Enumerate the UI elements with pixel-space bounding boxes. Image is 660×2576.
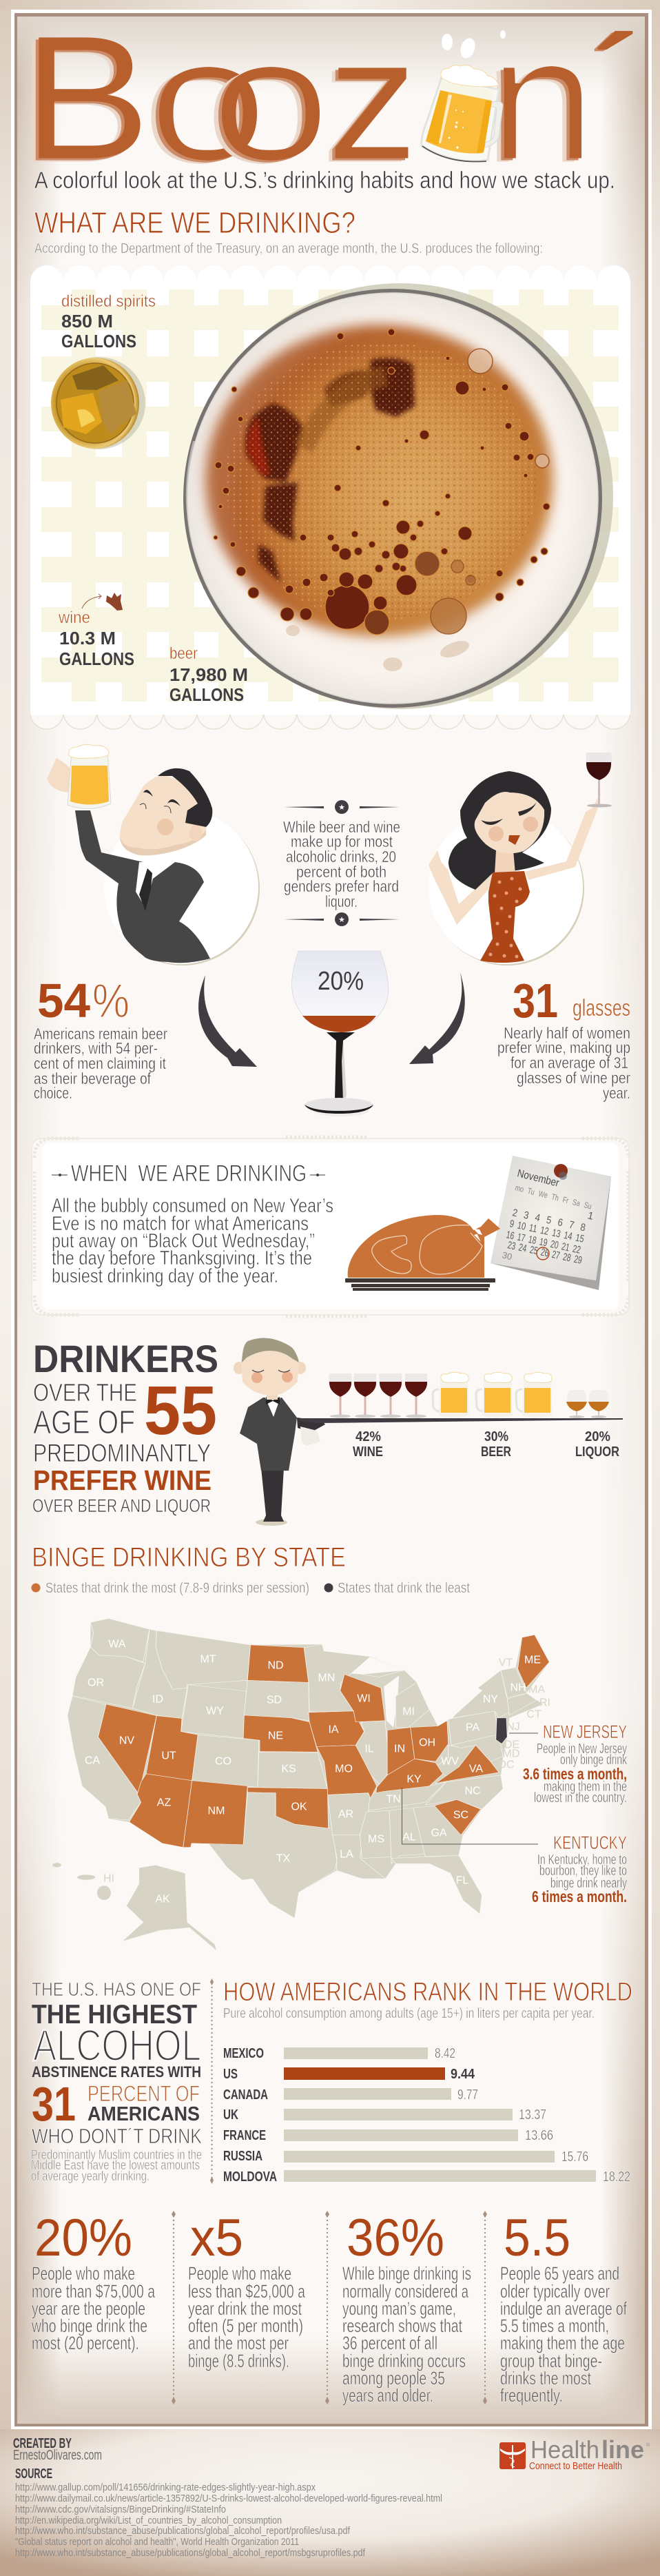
icon: wine stain and arrow [82, 593, 123, 611]
icon: calendar: 2 3 4 5 6 7 8 [511, 1207, 586, 1234]
source list [15, 2466, 442, 2559]
block: alcohol abstinence [31, 1979, 202, 2184]
map state labels: OH [419, 1737, 435, 1749]
stat column: 5.5: drinks the most [500, 2368, 591, 2389]
man shirt and tie [136, 862, 175, 911]
stat column: 36 percent [342, 2209, 471, 2406]
callout: Kentucky: KENTUCKY [553, 1832, 627, 1853]
map state labels: NE [268, 1730, 283, 1742]
label: wine: 10.3 M [59, 628, 116, 648]
title: Boozin': B [21, 0, 152, 196]
bubbles [214, 329, 550, 635]
bar: France: 13.66 [525, 2128, 553, 2143]
map state labels: DC [498, 1759, 515, 1771]
block: alcohol abstinence: PERCENT OF [87, 2081, 200, 2106]
source list: http://www.dailymail.co.uk/news/article-1357892/U-S-drinks-lowest-alcohol-developed-world-figures-reveal.html [15, 2493, 442, 2504]
credit: created by: ErnestoOlivares.com [13, 2448, 102, 2463]
label: wine [58, 609, 134, 669]
icon: roast turkey [345, 1215, 500, 1291]
stat: 31 glasses: prefer wine, making up [497, 1039, 630, 1056]
callout: beer and wine note: liquor. [325, 892, 358, 910]
man jacket [75, 810, 210, 963]
icon: calendar: 1 [586, 1209, 595, 1223]
dotted divider 3 [483, 2211, 487, 2404]
map state labels: SC [453, 1810, 468, 1821]
stat column: 20 percent: People who make [32, 2263, 135, 2284]
map state labels: ME [524, 1654, 541, 1666]
callout: beer and wine note: make up for most [291, 832, 393, 850]
map state labels: KS [281, 1763, 296, 1775]
map state labels: RI [539, 1697, 550, 1709]
stat column: x5: and the most per [188, 2333, 289, 2353]
map state labels: LA [340, 1848, 353, 1861]
label: 42 percent wine: 42% [355, 1429, 381, 1444]
logo: Healthline: Connect to Better Health [529, 2460, 622, 2472]
map state labels: HI [103, 1873, 114, 1884]
when paragraph: put away on “Black Out Wednesday,” [52, 1230, 315, 1252]
stat: 31 glasses: glasses [573, 995, 630, 1021]
when paragraph: All the bubbly consumed on New Year’s [52, 1195, 333, 1217]
source list: http://www.cdc.gov/vitalsigns/BingeDrinking/#StateInfo [15, 2504, 226, 2515]
callout: New Jersey: lowest in the country. [534, 1790, 627, 1806]
map state labels: NJ [506, 1721, 520, 1732]
stat column: x5: often (5 per month) [188, 2316, 303, 2336]
callout: Kentucky: binge drink nearly [550, 1876, 627, 1891]
map state labels: WI [357, 1693, 371, 1705]
woman wine glass [586, 753, 612, 808]
map state labels: SD [267, 1694, 282, 1706]
panel: production of alcohol [30, 265, 630, 729]
map state labels: AZ [157, 1797, 171, 1808]
label: distilled spirits: GALLONS [61, 331, 136, 351]
label: 30 percent beer: 30% [484, 1429, 508, 1444]
icon: calendar: November [516, 1167, 561, 1189]
waiter jacket [240, 1398, 297, 1471]
intro text: According to the Department of the Treasury, on an average month, the U.S. produces the following: [34, 241, 543, 256]
ornate border [32, 1137, 629, 1316]
source list: "Global status report on alcohol and health", World Health Organization 2011 [15, 2536, 299, 2548]
bar: Mexico: 8.42 [435, 2046, 455, 2061]
map state labels: TX [276, 1852, 291, 1865]
waiter shirt and bow tie [265, 1397, 280, 1417]
bar: Canada: CANADA [223, 2087, 268, 2103]
dotted divider [210, 1979, 214, 2184]
illustration: woman drinking wine [429, 753, 612, 965]
block: alcohol abstinence: THE U.S. HAS ONE OF [32, 1979, 201, 2000]
credit: created by [13, 2436, 102, 2463]
bar: Russia: RUSSIA [223, 2149, 262, 2164]
map state labels: ID [152, 1694, 163, 1705]
label: 20 percent liquor: 20% [585, 1429, 610, 1444]
waiter sleeve and towel [297, 1418, 325, 1446]
icon: calendar: 9 10 11 12 13 14 15 [508, 1218, 585, 1245]
bar: France [223, 2128, 553, 2143]
block: drinkers over age 55: AGE OF [33, 1404, 135, 1441]
woman dress [480, 871, 530, 963]
map state labels: MS [368, 1833, 384, 1846]
big wine glass with 20 percent [292, 951, 389, 1116]
block: alcohol abstinence: ABSTINENCE RATES WITH [32, 2063, 201, 2081]
callout: beer and wine note: genders prefer hard [284, 877, 399, 895]
stat: 31 glasses: 31 [513, 974, 558, 1028]
stat: 54 percent [34, 974, 167, 1102]
bar: France: FRANCE [223, 2128, 266, 2143]
stat: 54 percent: % [92, 974, 130, 1028]
stat column: x5: binge (8.5 drinks). [188, 2351, 289, 2371]
bar: US: 9.44 [451, 2067, 475, 2082]
heading: what are we drinking: WHAT ARE WE DRINKING? [34, 206, 355, 240]
man head [120, 768, 212, 855]
stat column: 36 percent: 36 percent of all [342, 2333, 437, 2353]
block: drinkers over age 55: 55 [144, 1372, 217, 1449]
bar: Canada [223, 2087, 478, 2103]
stat column: 5.5: older typically over [500, 2281, 610, 2302]
bar: UK [223, 2107, 546, 2123]
title: Boozin': o [209, 3, 332, 196]
block: alcohol abstinence: AMERICANS [87, 2103, 200, 2125]
label: wine: GALLONS [59, 648, 134, 669]
map state labels: MI [402, 1706, 415, 1717]
title: Boozin': z [327, 3, 419, 195]
stat column: 20 percent: who binge drink the [31, 2316, 147, 2336]
when heading: WHEN WE ARE DRINKING [71, 1161, 307, 1187]
bar: Moldova [223, 2169, 630, 2185]
bar: Russia [223, 2149, 588, 2165]
serving tray [300, 1418, 623, 1423]
bar: UK: 13.37 [519, 2107, 546, 2123]
block: alcohol abstinence: of average yearly drinking. [31, 2169, 149, 2184]
source list: http://www.gallup.com/poll/141656/drinking-rate-edges-slightly-year-high.aspx [15, 2482, 316, 2493]
stat: 54 percent: drinkers, with 54 per- [34, 1039, 158, 1057]
block: drinkers over age 55: PREFER WINE [33, 1464, 212, 1496]
stat: 54 percent: as their beverage of [34, 1070, 152, 1087]
map state labels [85, 1639, 550, 1905]
stat: 31 glasses: for an average of 31 [511, 1054, 628, 1072]
map state labels: NH [510, 1681, 526, 1694]
stat column: x5: year drink the most [188, 2298, 302, 2319]
dotted divider 2 [325, 2211, 329, 2404]
map state labels: DE [504, 1739, 519, 1750]
heading: binge drinking by state: BINGE DRINKING BY STATE [32, 1542, 346, 1573]
wine glasses on tray [329, 1373, 427, 1418]
when paragraph [52, 1195, 333, 1287]
stat column: x5: x5 [190, 2209, 243, 2267]
icon: calendar: 23 24 25 26 27 28 29 [506, 1239, 583, 1267]
callout: beer and wine note: While beer and wine [283, 818, 400, 836]
stat column: 36 percent: research shows that [342, 2316, 462, 2336]
icon: calendar: mo Tu We Th Fr Sa Su [514, 1183, 592, 1211]
block: drinkers over age 55 [32, 1337, 218, 1516]
title: Boozin' [21, 0, 646, 196]
source list: SOURCE [15, 2466, 52, 2482]
label: 42 percent wine [353, 1429, 383, 1460]
stat column: 36 percent: 36% [347, 2209, 444, 2267]
block: drinkers over age 55: DRINKERS [33, 1337, 218, 1380]
arrow: right to glass [409, 972, 465, 1064]
label: 20 percent liquor: LIQUOR [575, 1444, 619, 1460]
stat column: 36 percent: among people 35 [342, 2368, 445, 2389]
title: Boozin': n [488, 2, 597, 195]
bar chart: alcohol consumption by country [223, 2046, 630, 2185]
map state labels: AL [402, 1832, 416, 1843]
label: distilled spirits [61, 292, 156, 351]
label: beer: GALLONS [169, 684, 244, 705]
illustration: waiter [234, 1338, 325, 1526]
icon: beer glass seen from above [183, 283, 613, 709]
bar: US: US [223, 2067, 238, 2082]
map state shapes [52, 1619, 549, 1951]
stat column: x5 [188, 2209, 306, 2371]
when paragraph: Eve is no match for what Americans [52, 1213, 309, 1235]
map state labels: AR [338, 1808, 353, 1821]
map state labels: FL [456, 1874, 468, 1887]
icon: calendar [491, 1156, 611, 1290]
map state labels: WA [108, 1639, 126, 1650]
label: distilled spirits: 850 M [61, 311, 113, 331]
map state labels: MO [335, 1763, 353, 1775]
map state labels: ND [267, 1659, 284, 1672]
bar: UK: UK [223, 2107, 238, 2123]
bar: Moldova: MOLDOVA [223, 2169, 277, 2185]
callout: New Jersey: making them in the [544, 1779, 627, 1795]
block: alcohol abstinence: 31 [32, 2077, 76, 2131]
source list: http://www.who.int/substance_abuse/publications/global_alcohol_report/msbgsruprofiles.pdf [15, 2547, 366, 2559]
map state labels: OK [291, 1801, 307, 1812]
stat column: 5.5: 5.5 [504, 2209, 570, 2267]
bar: Canada: 9.77 [457, 2087, 478, 2103]
label: distilled spirits: distilled spirits [61, 292, 156, 311]
when paragraph: the day before Thanksgiving. It’s the [52, 1247, 312, 1269]
bar: Mexico [223, 2046, 455, 2061]
stat column: x5: less than $25,000 a [188, 2281, 306, 2302]
map state labels: VA [469, 1763, 483, 1775]
gingham pattern [41, 289, 619, 702]
block: alcohol abstinence: WHO DONT´T DRINK [32, 2124, 202, 2148]
beer mugs on tray [433, 1372, 553, 1418]
stat column: 36 percent: young man’s game, [342, 2298, 456, 2319]
logo: Healthline: Health [530, 2435, 599, 2464]
map state labels: KY [406, 1774, 422, 1785]
source list: http://www.who.int/substance_abuse/publications/global_alcohol_report/profiles/usa.pdf [15, 2525, 351, 2537]
stat: 54 percent: 54 [37, 974, 90, 1028]
map state labels: TN [386, 1793, 401, 1806]
label: wine: wine [58, 609, 90, 627]
label: 30 percent beer [481, 1429, 511, 1460]
stat: 31 glasses: glasses of wine per [517, 1069, 630, 1087]
map state labels: NC [464, 1785, 481, 1797]
stat column: 36 percent: years and older. [342, 2385, 433, 2406]
map state labels: VT [499, 1657, 513, 1669]
stat column: 36 percent: normally considered a [342, 2281, 469, 2302]
map state labels: IL [364, 1744, 374, 1755]
block: alcohol abstinence: Middle East have the lowest amounts [31, 2158, 200, 2173]
credit: created by: CREATED BY [13, 2436, 72, 2451]
logo icon [499, 2442, 526, 2469]
label: 20 percent liquor [575, 1429, 619, 1460]
callout: beer and wine note [283, 800, 400, 926]
logo: Healthline: ® [646, 2442, 650, 2448]
icon: beer mug replacing the letter i [422, 30, 506, 162]
map state labels: NM [208, 1806, 225, 1817]
source list: http://en.wikipedia.org/wiki/List_of_countries_by_alcohol_consumption [15, 2515, 282, 2526]
woman face [475, 792, 544, 874]
map state labels: MD [503, 1748, 519, 1760]
callout: Kentucky: bourbon, they like to [539, 1863, 627, 1879]
map state labels: WV [441, 1756, 459, 1767]
label: 42 percent wine: WINE [353, 1444, 383, 1460]
stat column: 20 percent: year are the people [32, 2298, 145, 2319]
illustration: man drinking beer [47, 744, 260, 965]
brandy glasses on tray [566, 1390, 609, 1418]
title: Boozin': ´ [593, 12, 646, 140]
stat: 31 glasses: Nearly half of women [504, 1024, 630, 1042]
icon: calendar: 16 17 18 19 20 21 22 [505, 1229, 581, 1256]
stat column: 5.5: 5.5 times a month, [500, 2316, 609, 2336]
big wine glass with 20 percent: 20% [318, 967, 364, 996]
map state labels: OR [87, 1677, 104, 1688]
block: drinkers over age 55: OVER THE [33, 1378, 137, 1407]
stat column: x5: People who make [188, 2263, 291, 2284]
label: beer: beer [169, 644, 198, 663]
map state labels: AK [155, 1894, 170, 1905]
man hand and beer mug [47, 744, 111, 809]
title: Boozin': i [451, 79, 470, 171]
woman hair [448, 771, 551, 890]
map state labels: MT [200, 1654, 216, 1665]
when paragraph: busiest drinking day of the year. [52, 1265, 278, 1287]
waiter head [234, 1338, 306, 1400]
waiter legs [261, 1468, 284, 1522]
callout: Kentucky: 6 times a month. [532, 1888, 627, 1905]
stat column: 36 percent: While binge drinking is [342, 2263, 471, 2284]
logo: Healthline: line [601, 2435, 644, 2464]
stat column: 20 percent: more than $75,000 a [32, 2281, 156, 2302]
callout: beer and wine note: percent of both [296, 863, 386, 881]
stat column: 36 percent: binge drinking occurs [342, 2351, 466, 2371]
bar: Moldova: 18.22 [603, 2169, 630, 2185]
map legend: States that drink the most (7.8-9 drinks per session) [45, 1580, 309, 1596]
stat: 31 glasses [497, 974, 630, 1102]
map: United States [52, 1619, 550, 1951]
map state labels: CA [85, 1755, 100, 1767]
label: 30 percent beer: BEER [481, 1444, 511, 1460]
map state labels: IA [328, 1724, 339, 1735]
map legend: States that drink the least [338, 1580, 470, 1596]
star ornament top [284, 800, 400, 814]
stat: 54 percent: Americans remain beer [34, 1025, 167, 1043]
stat column: 5.5: group that binge- [500, 2351, 602, 2371]
map state labels: MN [318, 1672, 335, 1684]
icon: whiskey glass [51, 357, 145, 449]
stat: 31 glasses: year. [603, 1084, 630, 1102]
block: drinkers over age 55: PREDOMINANTLY [33, 1439, 211, 1467]
star ornament bottom [284, 912, 400, 926]
callout: New Jersey: 3.6 times a month, [523, 1765, 627, 1783]
arrow: left to glass [198, 975, 257, 1067]
map state labels: PA [466, 1721, 479, 1734]
block: alcohol abstinence: THE HIGHEST [32, 2000, 197, 2030]
map state labels: MA [528, 1684, 545, 1695]
stat: 54 percent: cent of men claiming it [34, 1054, 167, 1072]
stat column: 5.5 [500, 2209, 627, 2406]
stat column: 5.5: frequently. [500, 2385, 563, 2406]
star ornament top: ★ [338, 804, 345, 812]
label: beer: 17,980 M [169, 664, 248, 685]
callout: Kentucky [402, 1788, 627, 1905]
star ornament bottom: ★ [338, 916, 345, 924]
label: beer [169, 644, 248, 705]
block: alcohol abstinence: ALCOHOL [33, 2021, 201, 2070]
stat column: 20 percent: most (20 percent). [32, 2333, 139, 2353]
map state labels: IN [394, 1744, 405, 1755]
stat column: 20 percent: 20% [34, 2209, 132, 2267]
map state labels: NV [119, 1735, 134, 1746]
woman arms [429, 793, 601, 925]
panel scallop edges [30, 265, 630, 729]
stat: 54 percent: choice. [34, 1084, 72, 1102]
callout: New Jersey: only binge drink [560, 1752, 628, 1768]
bar: Russia: 15.76 [561, 2149, 588, 2165]
logo: Healthline [499, 2435, 650, 2472]
map state labels: CT [526, 1709, 542, 1720]
map state labels: WY [206, 1705, 224, 1717]
map state labels: NY [483, 1694, 498, 1705]
callout: New Jersey [509, 1721, 628, 1806]
bar: US [223, 2067, 475, 2082]
dotted divider 1 [172, 2211, 176, 2404]
panel: when we are drinking [32, 1137, 629, 1316]
stat column: 20 percent [31, 2209, 156, 2353]
map state labels: UT [161, 1750, 176, 1761]
bar: Mexico: MEXICO [223, 2046, 264, 2061]
map state labels: GA [431, 1828, 447, 1839]
map state labels: CO [215, 1756, 231, 1767]
callout: beer and wine note: alcoholic drinks, 20 [286, 848, 396, 866]
title: Boozin': o [147, 3, 269, 196]
block: drinkers over age 55: OVER BEER AND LIQUOR [32, 1495, 211, 1516]
block: alcohol abstinence: Predominantly Muslim countries in the [31, 2148, 202, 2163]
icon: calendar: 30 [501, 1249, 513, 1262]
